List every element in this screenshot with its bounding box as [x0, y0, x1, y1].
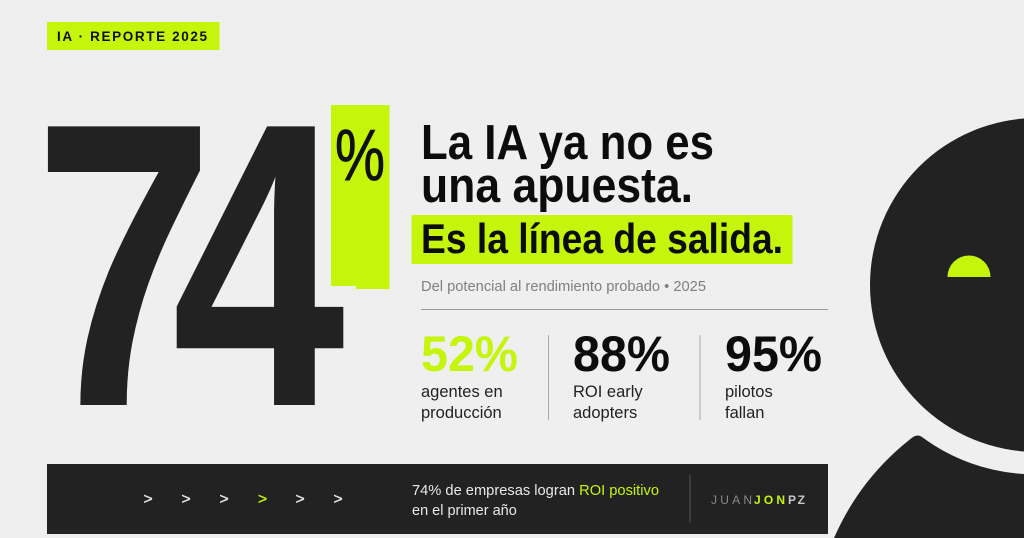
- bar message: [412, 483, 659, 519]
- big number 74: 7: [34, 38, 214, 491]
- stat: 88% ROI early adopters: [573, 326, 670, 422]
- stat: 52% agentes en producción: 52%: [421, 326, 518, 382]
- progress arrows: >: [219, 491, 229, 508]
- progress arrows: >: [143, 491, 153, 508]
- stat: 95% pilotos fallan: pilotos: [725, 383, 773, 401]
- big number 74: 4: [172, 38, 347, 491]
- subtitle: Del potencial al rendimiento probado • 2025: [421, 278, 706, 295]
- person head: [870, 118, 1024, 452]
- percent sign tag: [331, 105, 390, 289]
- stat: 88% ROI early adopters: ROI early: [573, 383, 643, 401]
- progress arrows: >: [258, 491, 267, 508]
- icon: person figure: [834, 118, 1024, 538]
- stat: 95% pilotos fallan: fallan: [725, 404, 764, 422]
- person shoulders: [834, 436, 1024, 538]
- brand signature: PZ: [788, 493, 805, 507]
- badge: report label: [47, 22, 220, 50]
- stat: 95% pilotos fallan: 95%: [725, 326, 822, 382]
- bar message: en el primer año: [412, 503, 517, 519]
- stat: 52% agentes en producción: [421, 326, 518, 422]
- headline: La IA ya no es: [421, 116, 714, 170]
- lime eye semicircle: [948, 256, 990, 277]
- brand signature: [711, 493, 805, 507]
- bottom bar: [47, 464, 828, 534]
- headline highlight: Es la línea de salida.: [421, 215, 783, 262]
- headline: una apuesta.: [421, 159, 693, 213]
- brand signature: JON: [754, 493, 785, 507]
- progress arrows: [143, 491, 343, 508]
- big number 74: [34, 38, 347, 491]
- progress arrows: >: [181, 491, 191, 508]
- stat: 88% ROI early adopters: adopters: [573, 404, 637, 422]
- stat: 52% agentes en producción: producción: [421, 404, 502, 422]
- stat: 52% agentes en producción: agentes en: [421, 383, 503, 401]
- badge: report label: IA · REPORTE 2025: [57, 29, 207, 44]
- percent sign tag: %: [335, 116, 385, 196]
- headline: [412, 116, 792, 264]
- bar message: 74% de empresas logran ROI positivo: [412, 483, 659, 499]
- brand signature: JUAN: [711, 493, 752, 507]
- stat: 88% ROI early adopters: 88%: [573, 326, 670, 382]
- progress arrows: >: [333, 491, 343, 508]
- progress arrows: >: [295, 491, 305, 508]
- stat: 95% pilotos fallan: [725, 326, 822, 422]
